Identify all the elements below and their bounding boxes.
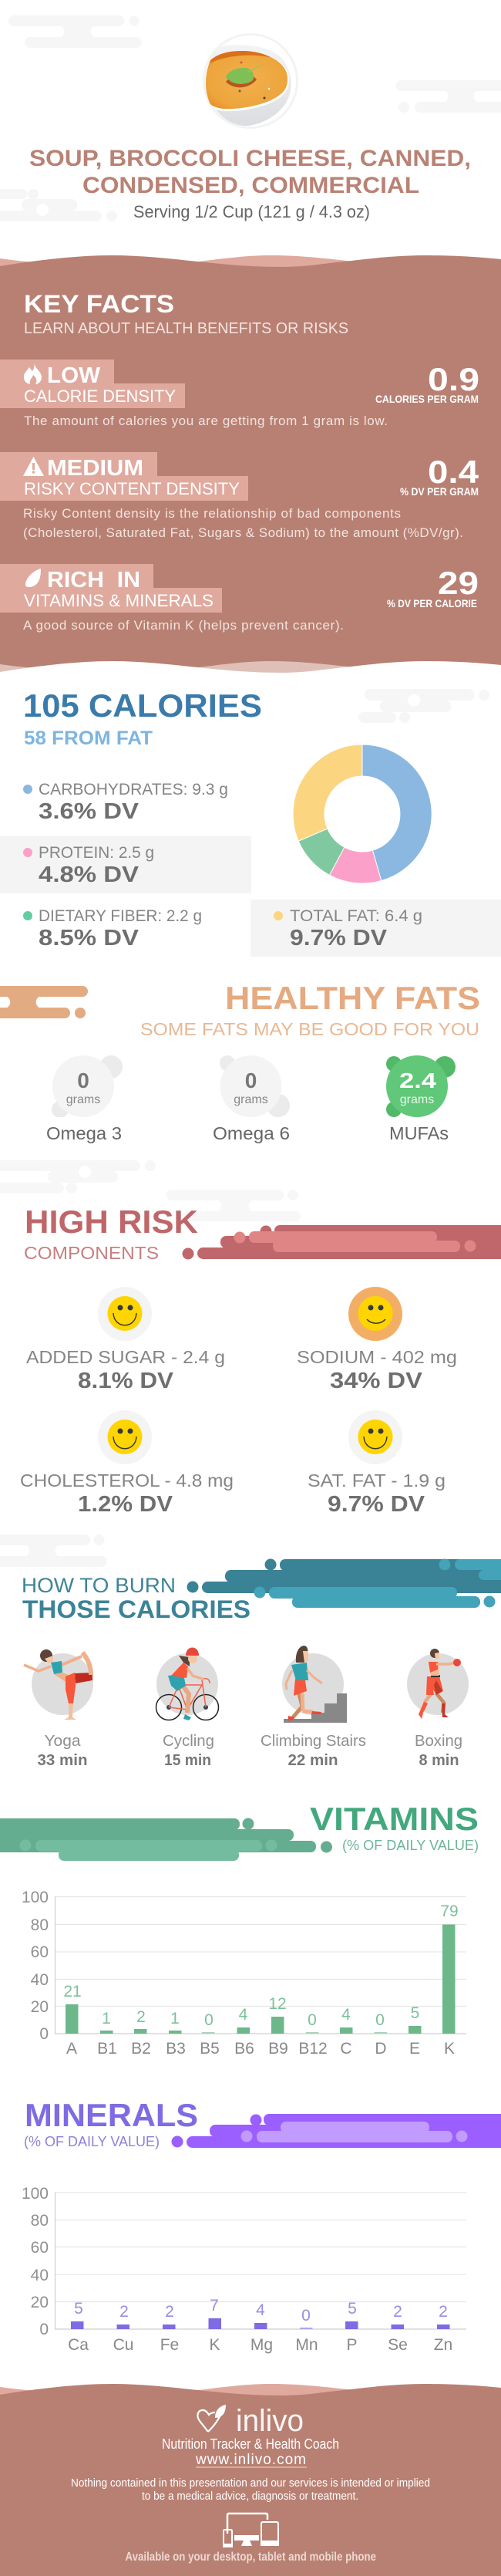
heading: high risk: HIGH RISK [25,1204,198,1240]
activity: climbing stairs: Climbing Stairs [261,1733,366,1750]
bar chart: minerals: 2 [165,2303,174,2321]
legend: dietary fiber: 8.5% DV [39,926,140,950]
stat: saturated fat [308,1470,446,1517]
disclaimer [71,2476,430,2503]
bar chart: vitamins: 60 [31,1943,49,1961]
bar chart: minerals: 2 [439,2303,448,2321]
availability note: Available on your desktop, tablet and mobile phone [125,2551,376,2564]
tag: rich in vitamins and minerals: VITAMINS & MINERALS [24,591,214,610]
metric: 29 dv per calorie [387,565,479,609]
subheading: (% OF DAILY VALUE) [24,2134,160,2149]
heading: 105 calories: 105 CALORIES [23,687,262,724]
stat: added sugar: 8.1% DV [78,1369,174,1393]
bar chart: vitamins: B1 [97,2040,117,2058]
bar chart: vitamins: 12 [268,1995,287,2013]
bar chart: vitamins: 0 [308,2011,317,2029]
bubble: omega 3: Omega 3 [46,1123,122,1143]
legend: dietary fiber [23,907,202,950]
metric: 0.4 dv per gram: 0.4 [428,454,479,490]
decoration: green cloud [0,1818,332,1861]
bar chart: minerals: 7 [210,2297,219,2314]
heading: key facts: KEY FACTS [24,290,174,318]
metric: 0.9 calories per gram: 0.9 [428,361,479,397]
text: medium description: Risky Content density is the relationship of bad components [23,506,401,521]
bar chart: vitamins: 100 [22,1889,49,1906]
metric: 29 dv per calorie: 29 [438,565,479,601]
icon: soup bowl [203,34,298,128]
activity: climbing stairs [261,1646,366,1769]
icon: warning triangle [23,457,44,476]
icon: smiley cholesterol [98,1410,152,1464]
stat: cholesterol: 1.2% DV [78,1492,173,1517]
bar chart: vitamins: 2 [136,2008,146,2026]
tag: rich in vitamins and minerals [0,564,222,613]
bubble: omega 6: grams [234,1093,268,1106]
subheading: 58 from fat: 58 FROM FAT [24,728,153,749]
text: low description: The amount of calories you are getting from 1 gram is low. [24,414,388,428]
stat: saturated fat: 9.7% DV [328,1492,425,1517]
heading: how to burn: HOW TO BURN [22,1574,176,1597]
metric: 0.9 calories per gram [375,361,479,405]
website link: www.inlivo.com [195,2452,306,2468]
bubble: omega 3: 0 [77,1069,89,1092]
background cloud burn [0,1534,107,1567]
bar chart: minerals: Mg [250,2336,273,2354]
bar chart: vitamins: 40 [31,1971,49,1989]
panel: vitamins [0,1801,479,2058]
subheading: LEARN ABOUT HEALTH BENEFITS OR RISKS [24,320,348,337]
legend: protein: PROTEIN: 2.5 g [39,844,154,862]
metric: 29 dv per calorie: % DV PER CALORIE [387,597,477,609]
decoration: red cloud [182,1225,501,1259]
text: medium description [23,506,463,540]
activity: yoga [24,1649,93,1769]
background cloud mid left [0,1160,156,1193]
tag: low calorie density: CALORIE DENSITY [24,387,176,406]
stat: sodium: 34% DV [330,1369,423,1393]
subheading: components: COMPONENTS [24,1243,159,1263]
metric: 0.4 dv per gram: % DV PER GRAM [400,485,479,498]
icon: leaf [25,569,41,587]
subheading: SOME FATS MAY BE GOOD FOR YOU [140,1019,479,1039]
legend: dietary fiber: DIETARY FIBER: 2.2 g [39,907,202,925]
bubble: mufas: grams [400,1093,434,1106]
bubble: mufas [386,1055,456,1143]
text: rich description: A good source of Vitamin K (helps prevent cancer). [23,618,344,633]
bar chart: minerals: 100 [22,2185,49,2203]
bar chart: vitamins: K [444,2040,455,2058]
bar chart: vitamins: B2 [131,2040,151,2058]
heading: vitamins: VITAMINS [310,1801,479,1837]
bar chart: vitamins: 1 [102,2010,111,2027]
bubble: omega 3 [46,1055,123,1143]
bar chart: vitamins: 20 [31,1998,49,2016]
bar chart: minerals: Se [388,2336,408,2354]
activity: cycling [156,1648,219,1769]
bar chart: vitamins: B3 [166,2040,186,2058]
bar chart: vitamins: 1 [170,2010,180,2027]
bar chart: minerals: 40 [31,2267,49,2284]
activity: boxing: 8 min [419,1752,459,1769]
bar chart: vitamins: 80 [31,1916,49,1934]
stat: sodium: SODIUM - 402 mg [297,1347,457,1367]
panel: minerals [22,2097,501,2354]
bar chart: vitamins: D [375,2040,387,2058]
legend: carbohydrates: CARBOHYDRATES: 9.3 g [39,781,228,798]
icon: devices [223,2514,279,2547]
stat: saturated fat: SAT. FAT - 1.9 g [308,1470,446,1491]
decoration: teal cloud [187,1558,501,1608]
bar chart: vitamins: 5 [411,2004,419,2022]
bubble: mufas: 2.4 [399,1069,437,1092]
bar chart: minerals: 2 [119,2303,129,2321]
bar chart: minerals: Cu [113,2336,133,2354]
bar chart: vitamins: E [409,2040,420,2058]
background cloud left of serving [0,189,117,221]
legend: total fat [274,907,422,950]
legend: carbohydrates: 3.6% DV [39,799,140,824]
legend: protein: 4.8% DV [39,863,140,887]
logo: inlivo: inlivo [236,2404,304,2438]
band: total fat [250,900,501,957]
decoration: purple cloud [171,2114,501,2148]
title [29,146,471,198]
figure: stair climber [284,1646,347,1723]
activity: cycling: Cycling [163,1733,214,1750]
tag: low calorie density [0,360,185,408]
tag: low calorie density: LOW [47,363,101,388]
panel: high risk [20,1204,501,1517]
bar chart: vitamins: 79 [440,1902,459,1920]
bar chart: minerals: 4 [256,2301,265,2319]
bar chart: minerals: P [346,2336,358,2354]
bar chart: vitamins: 4 [341,2006,351,2024]
bar chart: minerals: 20 [31,2294,49,2311]
activity: yoga: Yoga [45,1733,81,1750]
icon: smiley sodium [348,1287,402,1341]
panel: how to burn [22,1558,501,1769]
bar chart: minerals: 60 [31,2239,49,2257]
legend: total fat: 9.7% DV [290,926,388,950]
bar chart: minerals: Ca [68,2336,89,2354]
serving size: Serving 1/2 Cup (121 g / 4.3 oz) [133,202,370,221]
bar chart: minerals: Fe [160,2336,179,2354]
background cloud top right [396,80,501,113]
bar chart: vitamins: C [340,2040,352,2058]
figure: cyclist [156,1648,219,1720]
bubble: omega 6: 0 [245,1069,257,1092]
legend: total fat: TOTAL FAT: 6.4 g [290,907,422,925]
bar chart: vitamins: 0 [375,2011,385,2029]
metric: 0.4 dv per gram [400,454,479,498]
bar chart: vitamins: B12 [298,2040,328,2058]
metric: 0.9 calories per gram: CALORIES PER GRAM [375,393,479,405]
stat: added sugar: ADDED SUGAR - 2.4 g [26,1347,225,1367]
text: medium description: (Cholesterol, Saturated Fat, Sugars & Sodium) to the amount (%DV/gr). [23,525,463,540]
heading: those calories: THOSE CALORIES [22,1595,250,1623]
activity: climbing stairs: 22 min [288,1752,338,1769]
activity: boxing: Boxing [415,1733,462,1750]
disclaimer: to be a medical advice, diagnosis or treatment. [142,2490,358,2503]
bar chart: minerals: 5 [348,2300,357,2318]
bar chart: minerals: 5 [74,2300,83,2318]
donut chart [293,744,432,883]
stat: cholesterol: CHOLESTEROL - 4.8 mg [20,1470,234,1491]
panel: healthy fats [0,980,480,1143]
background cloud top left [8,15,142,48]
icon: flame [24,363,42,384]
subheading: (% OF DAILY VALUE) [342,1838,479,1853]
disclaimer: Nothing contained in this presentation and our services is intended or implied [71,2476,430,2490]
bar chart: minerals: 2 [393,2303,402,2321]
bar chart: minerals: 0 [301,2307,311,2324]
panel: calories [0,687,501,957]
figure: yoga pose [24,1649,92,1720]
bar chart: vitamins: 4 [239,2006,248,2024]
bar chart: vitamins: B6 [234,2040,254,2058]
bar chart: minerals: 0 [39,2321,49,2338]
bar chart: vitamins: 0 [39,2025,49,2043]
band: protein [0,836,251,893]
activity: yoga: 33 min [37,1752,88,1769]
panel: footer [0,2384,501,2576]
heading: healthy fats: HEALTHY FATS [225,980,480,1016]
tag: medium risky content density: RISKY CONTENT DENSITY [24,479,240,498]
logo: inlivo [197,2404,304,2438]
tag: medium risky content density [0,452,248,501]
bubble: omega 6 [213,1055,290,1143]
icon: smiley added sugar [98,1287,152,1341]
bar chart: minerals: Zn [434,2336,452,2354]
bubble: mufas: MUFAs [389,1123,449,1143]
bar chart: vitamins: 0 [204,2011,214,2029]
stat: added sugar [26,1347,225,1393]
tag: rich in vitamins and minerals: RICH IN [47,568,140,593]
icon: smiley saturated fat [348,1410,402,1464]
bar chart: minerals [22,2185,466,2354]
bubble: omega 3: grams [66,1093,100,1106]
decoration: orange cloud [0,986,88,1018]
background cloud mid center [166,1190,301,1221]
background cloud calories [358,689,489,723]
bar chart: vitamins [22,1889,466,2058]
stat: sodium [297,1347,457,1393]
legend: protein [23,844,154,887]
bar chart: vitamins: B9 [268,2040,288,2058]
bar chart: vitamins: A [66,2040,77,2058]
bar chart: vitamins: B5 [200,2040,220,2058]
title: SOUP, BROCCOLI CHEESE, CANNED, [29,146,471,171]
bubble: omega 6: Omega 6 [213,1123,290,1143]
bar chart: minerals: 80 [31,2212,49,2230]
heading: minerals: MINERALS [25,2097,198,2133]
tag: medium risky content density: MEDIUM [47,456,143,481]
legend: carbohydrates [23,781,228,824]
bar chart: minerals: K [209,2336,220,2354]
activity: boxing [407,1649,469,1769]
activity: cycling: 15 min [164,1752,211,1769]
stat: cholesterol [20,1470,234,1517]
bar chart: minerals: Mn [295,2336,318,2354]
bar chart: vitamins: 21 [63,1983,82,2000]
figure: boxer [419,1649,461,1719]
panel: key facts [0,255,501,687]
title: CONDENSED, COMMERCIAL [82,173,419,198]
tagline: Nutrition Tracker & Health Coach [162,2436,339,2452]
